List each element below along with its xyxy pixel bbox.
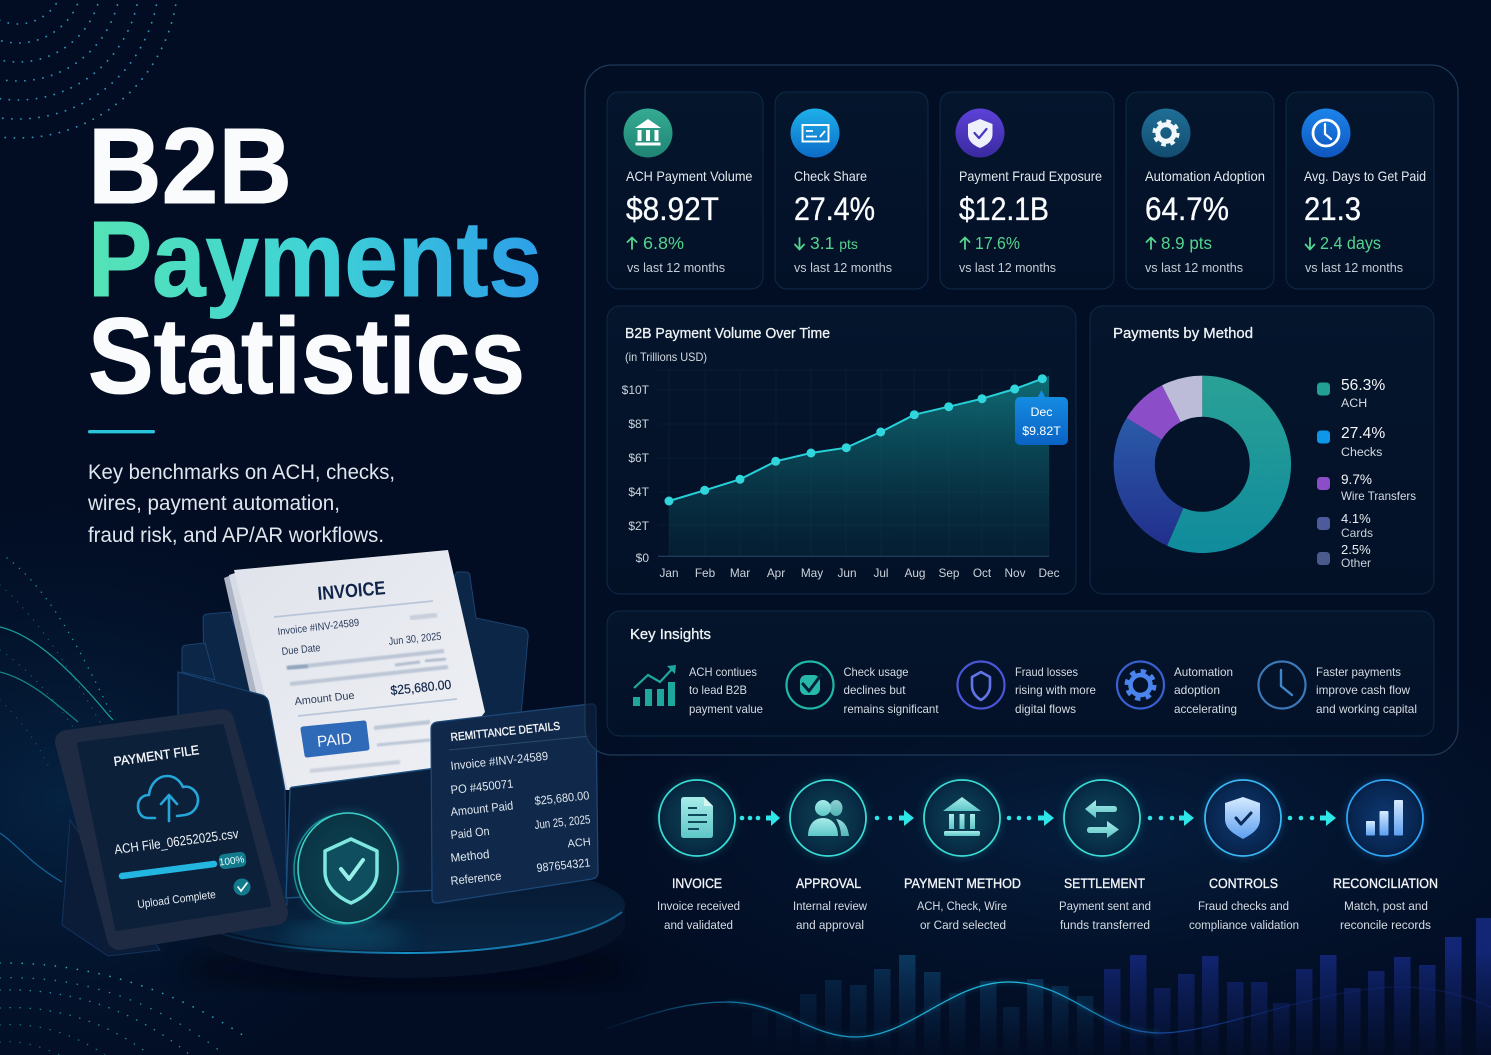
KPI card: Avg. Days to Get Paid: Avg. Days to Get Paid (1304, 169, 1426, 184)
chart y axis labels: $10T (622, 383, 650, 397)
step: approval (790, 780, 867, 932)
KPI card: Avg. Days to Get Paid: 21.3 (1304, 191, 1361, 227)
icon: bank (624, 108, 672, 158)
step: reconciliation: reconcile records (1340, 918, 1431, 932)
insight: checks (786, 662, 939, 716)
insight: automation: Automation (1174, 665, 1233, 679)
KPI card: Payment Fraud Exposure: vs last 12 months (959, 261, 1056, 275)
remittance card: PO #450071 (450, 776, 514, 797)
callout: December value: $9.82T (1022, 424, 1061, 438)
title accent divider (88, 430, 155, 433)
insight: checks: remains significant (844, 702, 939, 716)
title: Payments (88, 198, 542, 319)
insight: faster payments (1258, 662, 1417, 716)
remittance card: Method (450, 847, 490, 865)
decoration: bottom wave line (606, 982, 1491, 1037)
arrow: controls to reconciliation (1288, 810, 1336, 826)
chart gridlines (658, 370, 1049, 556)
progress bar (122, 864, 214, 876)
trend: down 2.4 days: 2.4 days (1320, 233, 1381, 253)
legend: ACH: ACH (1341, 396, 1367, 410)
tablet stand (62, 820, 160, 956)
paid stamp: PAID (316, 730, 353, 751)
title: B2B (88, 105, 292, 226)
insight: faster payments: improve cash flow (1316, 683, 1410, 697)
process flow (657, 780, 1438, 932)
icon: exchange arrows (1064, 780, 1140, 856)
title: Statistics (88, 295, 525, 416)
icon: clock outline (1258, 662, 1306, 708)
KPI card: ACH Payment Volume: $8.92T (626, 191, 719, 227)
chart x axis labels: Aug (904, 566, 926, 580)
icon: clock (1302, 108, 1350, 158)
step: reconciliation: RECONCILIATION (1333, 875, 1438, 891)
subtitle: fraud risk, and AP/AR workflows. (88, 524, 384, 547)
subtitle: Key benchmarks on ACH, checks, (88, 461, 395, 484)
KPI card: ACH Payment Volume: ACH Payment Volume (626, 169, 752, 184)
chart line (664, 374, 1047, 506)
arrow: settlement to controls (1148, 810, 1194, 826)
insight: automation (1117, 662, 1237, 716)
chart x axis labels: Jul (873, 566, 889, 580)
step: invoice (657, 780, 740, 932)
arrow: invoice to approval (740, 810, 780, 826)
legend: Checks: Checks (1341, 445, 1382, 459)
invoice paper stack (224, 572, 292, 790)
chart x axis labels: May (801, 566, 823, 580)
insight: fraud: rising with more (1015, 683, 1096, 697)
payment file tablet (67, 721, 276, 938)
step: settlement: funds transferred (1060, 918, 1150, 932)
icon: shield check (1205, 780, 1281, 856)
insight: faster payments: Faster payments (1316, 665, 1401, 679)
chart y axis labels: $6T (628, 451, 650, 465)
remittance card: $25,680.00 (534, 788, 590, 808)
insight: ACH: payment value (689, 702, 763, 716)
icon: gear (1142, 108, 1190, 158)
legend: Other: 2.5% (1341, 542, 1371, 557)
legend: Other (1317, 542, 1371, 570)
payment file tablet: PAYMENT FILE (113, 742, 200, 769)
arrow: approval to payment method (875, 810, 914, 826)
step: payment method (904, 780, 1021, 932)
chart y axis labels (622, 383, 650, 565)
icon: fraud shield (958, 662, 1004, 708)
invoice heading: INVOICE (317, 578, 386, 605)
step: invoice: INVOICE (672, 875, 722, 891)
insight: automation: accelerating (1174, 702, 1237, 716)
donut chart (1114, 376, 1291, 553)
KPI card: Check Share: Check Share (794, 169, 867, 184)
step: controls: CONTROLS (1209, 875, 1278, 891)
decoration: top-left dotted arcs (0, 0, 178, 138)
progress label: 100% (218, 854, 245, 869)
step: controls (1189, 780, 1299, 932)
legend: Checks (1317, 425, 1385, 459)
chart x axis labels: Dec (1039, 566, 1060, 580)
step: settlement (1059, 780, 1151, 932)
chart x axis labels: Jun (837, 566, 857, 580)
KPI card: Payment Fraud Exposure (940, 92, 1114, 289)
insight: automation: adoption (1174, 683, 1220, 697)
title (88, 105, 542, 416)
panel: volume line chart: (in Trillions USD) (625, 350, 707, 364)
invoice number: Invoice #INV-24589 (277, 618, 360, 638)
chart y axis labels: $0 (636, 551, 649, 565)
remittance card (431, 704, 598, 903)
illustration: invoice tray with documents (62, 550, 630, 982)
chart x axis labels: Mar (730, 566, 750, 580)
legend: ACH: 56.3% (1341, 377, 1385, 394)
insight: fraud: digital flows (1015, 702, 1076, 716)
remittance card: Paid On (450, 824, 490, 842)
step: approval: Internal review (793, 899, 867, 913)
icon: document (659, 780, 735, 856)
callout: December value (1015, 390, 1068, 445)
step: reconciliation (1333, 780, 1438, 932)
invoice paper: Jun 30, 2025 (388, 630, 442, 648)
step: reconciliation: Match, post and (1344, 899, 1428, 913)
dashboard panel (585, 65, 1458, 755)
insight: checks: Check usage (844, 665, 909, 679)
step: settlement: Payment sent and (1059, 899, 1151, 913)
panel: key insights (607, 611, 1434, 736)
legend: Wire Transfers: 9.7% (1341, 472, 1372, 487)
chart x axis labels: Oct (973, 566, 992, 580)
chart x axis labels: Nov (1005, 566, 1026, 580)
insight: ACH (633, 665, 763, 716)
panel: key insights: Key Insights (630, 626, 711, 643)
icon: upload check (234, 878, 250, 896)
icon: check (790, 108, 840, 158)
step: controls: compliance validation (1189, 918, 1299, 932)
remittance card: Invoice #INV-24589 (450, 749, 549, 773)
platform (180, 859, 630, 982)
trend: down 3.1 pts: 3.1 pts (810, 233, 858, 253)
icon: people (790, 780, 866, 856)
paid stamp (303, 723, 367, 755)
icon: bank building (924, 780, 1000, 856)
KPI card: Automation Adoption (1126, 92, 1274, 289)
insight: fraud (958, 662, 1096, 716)
legend: ACH (1317, 377, 1385, 410)
shield coin (294, 812, 400, 924)
invoice paper: $25,680.00 (390, 677, 452, 698)
amount due: Amount Due (294, 690, 355, 708)
chart y axis labels: $8T (628, 417, 650, 431)
insight: ACH: to lead B2B (689, 683, 747, 697)
panel: volume line chart (607, 306, 1076, 594)
payment file tablet: ACH File_06252025.csv (113, 826, 240, 857)
KPI card: Automation Adoption: vs last 12 months (1145, 261, 1243, 275)
KPI card: Payment Fraud Exposure: Payment Fraud Exposure (959, 169, 1102, 184)
step: invoice: and validated (664, 918, 733, 932)
panel: payments by method (1090, 306, 1434, 594)
legend: Other: Other (1341, 556, 1371, 570)
callout: December value: Dec (1030, 405, 1053, 419)
legend: Checks: 27.4% (1341, 425, 1385, 442)
chart x axis labels: Jan (659, 566, 679, 580)
legend: Cards (1317, 511, 1373, 540)
chart x axis labels: Feb (695, 566, 716, 580)
remittance card: ACH (567, 836, 591, 850)
KPI card: Avg. Days to Get Paid: vs last 12 months (1305, 261, 1403, 275)
legend: Wire Transfers: Wire Transfers (1341, 489, 1416, 503)
insight: ACH: ACH contiues (689, 665, 757, 679)
step: approval: APPROVAL (796, 875, 861, 891)
KPI card: Check Share: vs last 12 months (794, 261, 892, 275)
step: settlement: SETTLEMENT (1064, 875, 1145, 891)
decoration: left waves and dots (0, 558, 250, 1055)
chart x axis labels: Apr (767, 566, 785, 580)
step: payment method: ACH, Check, Wire (917, 899, 1007, 913)
step: controls: Fraud checks and (1198, 899, 1289, 913)
step: payment method: or Card selected (920, 918, 1006, 932)
KPI card: Automation Adoption: 64.7% (1145, 191, 1229, 227)
icon: bars (1347, 780, 1423, 856)
icon: growth chart (633, 665, 676, 706)
step: payment method: PAYMENT METHOD (904, 875, 1021, 891)
trend: up 6.8%: 6.8% (643, 233, 684, 253)
chart y axis labels: $2T (628, 519, 650, 533)
remittance card: 987654321 (536, 855, 591, 875)
icon: upload cloud (138, 776, 198, 821)
trend: up 17.6%: 17.6% (975, 233, 1020, 253)
invoice paper (234, 550, 485, 790)
insight: checks: declines but (844, 683, 906, 697)
decoration: bottom-right bar chart (752, 918, 1491, 1055)
KPI card: ACH Payment Volume: vs last 12 months (627, 261, 725, 275)
remittance card: Reference (450, 869, 502, 888)
KPI card: Avg. Days to Get Paid (1286, 92, 1434, 289)
subtitle: wires, payment automation, (87, 492, 340, 515)
icon: check usage (786, 662, 834, 708)
KPI card: Payment Fraud Exposure: $12.1B (959, 191, 1049, 227)
due date: Due Date (281, 642, 321, 658)
legend: Cards: 4.1% (1341, 511, 1371, 526)
remittance card: REMITTANCE DETAILS (450, 721, 561, 744)
payment file tablet: Upload Complete (137, 889, 217, 911)
step: approval: and approval (796, 918, 864, 932)
KPI card: Automation Adoption: Automation Adoption (1145, 169, 1265, 184)
legend: Cards: Cards (1341, 526, 1373, 540)
panel: volume line chart: B2B Payment Volume Over Time (625, 326, 830, 342)
icon: shield (956, 108, 1004, 158)
chart y axis labels: $4T (628, 485, 650, 499)
remittance card: Jun 25, 2025 (534, 812, 591, 832)
panel: payments by method: Payments by Method (1113, 326, 1253, 342)
KPI card: ACH Payment Volume (607, 92, 763, 289)
remittance card: Amount Paid (450, 798, 514, 819)
arrow: payment method to settlement (1007, 810, 1054, 826)
chart x axis labels (659, 566, 1060, 580)
chart area (669, 376, 1049, 556)
trend: up 8.9 pts: 8.9 pts (1161, 233, 1212, 253)
KPI card: Check Share (775, 92, 928, 289)
legend: Wire Transfers (1317, 472, 1416, 503)
insight: fraud: Fraud losses (1015, 665, 1078, 679)
tray front (150, 672, 440, 905)
subtitle (87, 461, 395, 547)
chart x axis labels: Sep (938, 566, 960, 580)
icon: automation gear (1117, 662, 1164, 708)
tray back panels (182, 572, 528, 760)
insight: faster payments: and working capital (1316, 702, 1417, 716)
step: invoice: Invoice received (657, 899, 740, 913)
KPI card: Check Share: 27.4% (794, 191, 875, 227)
